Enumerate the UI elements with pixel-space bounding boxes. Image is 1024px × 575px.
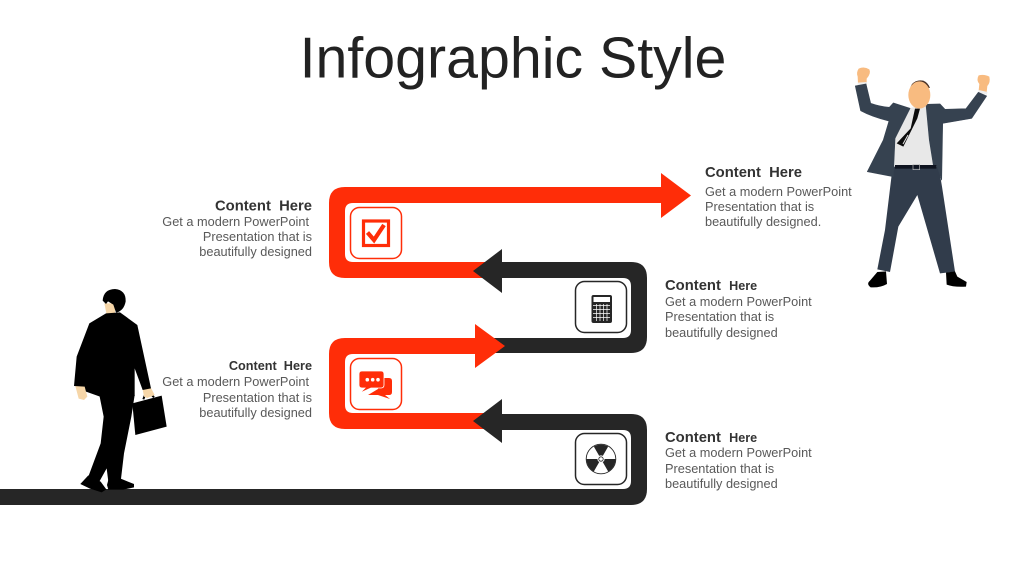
jacket and arms: [855, 84, 910, 177]
shirt cuffs: [858, 82, 988, 95]
shoes: [868, 271, 887, 287]
text: second right content: Presentation that is: [665, 309, 774, 324]
text: top left content: beautifully designed: [199, 244, 312, 259]
text: bottom right content: Presentation that is: [665, 461, 774, 476]
belt: [895, 164, 936, 170]
figure: walking businessman: [74, 289, 167, 492]
text: top right content: Content Here: [705, 165, 802, 181]
text: lower left content: Presentation that is: [203, 390, 312, 405]
text: top right content: Get a modern PowerPoint: [705, 184, 852, 199]
text: bottom right content: Content Here: [665, 430, 757, 446]
arrow path: top red segment: [329, 173, 691, 278]
icon: radiation: [576, 434, 626, 484]
text: second right content: Get a modern PowerPoint: [665, 294, 812, 309]
icon: chat bubbles: [350, 358, 402, 410]
text: lower left content: [162, 359, 312, 420]
trousers: [88, 395, 135, 482]
text: lower left content: Get a modern PowerPoint: [162, 374, 309, 389]
briefcase: [132, 394, 167, 435]
title: Infographic Style: [300, 26, 726, 90]
text: top right content: Presentation that is: [705, 199, 814, 214]
text: top left content: Presentation that is: [203, 229, 312, 244]
text: top left content: Content Here: [215, 198, 312, 214]
arrow path: bottom black segment: [0, 399, 647, 505]
text: bottom right content: Get a modern PowerPoint: [665, 445, 812, 460]
text: second right content: beautifully designed: [665, 325, 778, 340]
text: top right content: [705, 165, 852, 229]
shoes: [80, 475, 106, 492]
head: [908, 80, 930, 109]
figure: celebrating businessman: [855, 67, 990, 287]
text: top right content: beautifully designed.: [705, 214, 821, 229]
shirt: [895, 105, 935, 167]
hands and neck: [75, 303, 155, 400]
text: top left content: [162, 198, 312, 259]
text: second right content: Content Here: [665, 278, 757, 294]
trousers: [877, 167, 955, 273]
text: lower left content: Content Here: [229, 359, 312, 373]
text: lower left content: beautifully designed: [199, 405, 312, 420]
icon: checkbox: [350, 208, 402, 258]
hair: [103, 289, 126, 313]
icon: calculator: [576, 282, 626, 332]
fists: [857, 67, 990, 92]
text: second right content: [665, 278, 812, 340]
arrow path: lower red segment: [329, 324, 505, 429]
tie: [897, 109, 920, 147]
jacket: [74, 312, 151, 397]
text: bottom right content: [665, 430, 812, 491]
text: top left content: Get a modern PowerPoint: [162, 214, 309, 229]
text: bottom right content: beautifully designed: [665, 476, 778, 491]
arrow path: upper black segment: [473, 249, 647, 353]
